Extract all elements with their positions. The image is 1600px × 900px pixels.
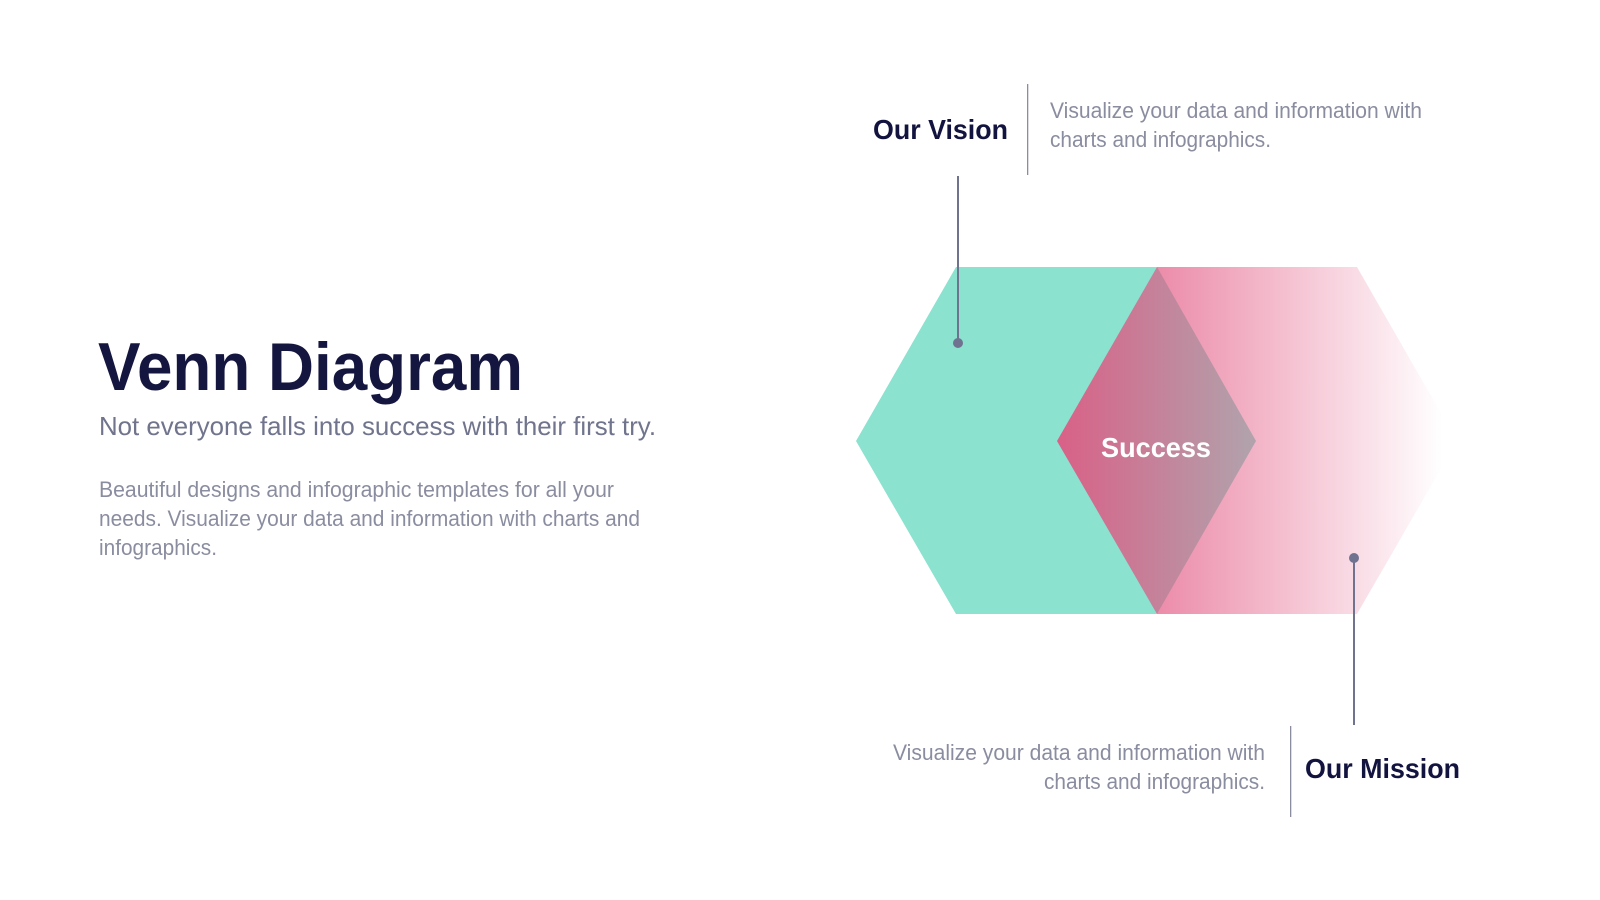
- vision callout: [873, 84, 1422, 348]
- label: success: Success: [1101, 432, 1211, 463]
- body text: needs. Visualize your data and information with charts and: [99, 506, 640, 531]
- hexagon: mission: [1057, 267, 1457, 614]
- text: mission description: charts and infographics.: [1044, 769, 1265, 794]
- text: mission description: Visualize your data and information with: [893, 740, 1265, 765]
- body text: infographics.: [99, 535, 217, 560]
- body text: [99, 477, 640, 560]
- divider: [1290, 726, 1291, 817]
- venn diagram: [856, 267, 1457, 614]
- title: Venn Diagram: [98, 329, 523, 405]
- text: vision description: charts and infographics.: [1050, 127, 1271, 152]
- subtitle: Not everyone falls into success with their first try.: [99, 411, 656, 441]
- text: vision description: [1050, 98, 1422, 152]
- text: mission description: [893, 740, 1265, 794]
- heading: our mission: Our Mission: [1305, 753, 1460, 784]
- connector: mission: [1349, 553, 1359, 725]
- body text: Beautiful designs and infographic templates for all your: [99, 477, 614, 502]
- connector: vision: [953, 176, 963, 348]
- mission callout: [893, 553, 1460, 817]
- heading: our vision: Our Vision: [873, 114, 1008, 145]
- text: vision description: Visualize your data and information with: [1050, 98, 1422, 123]
- hexagon: vision: [856, 267, 1256, 614]
- divider: [1027, 84, 1028, 175]
